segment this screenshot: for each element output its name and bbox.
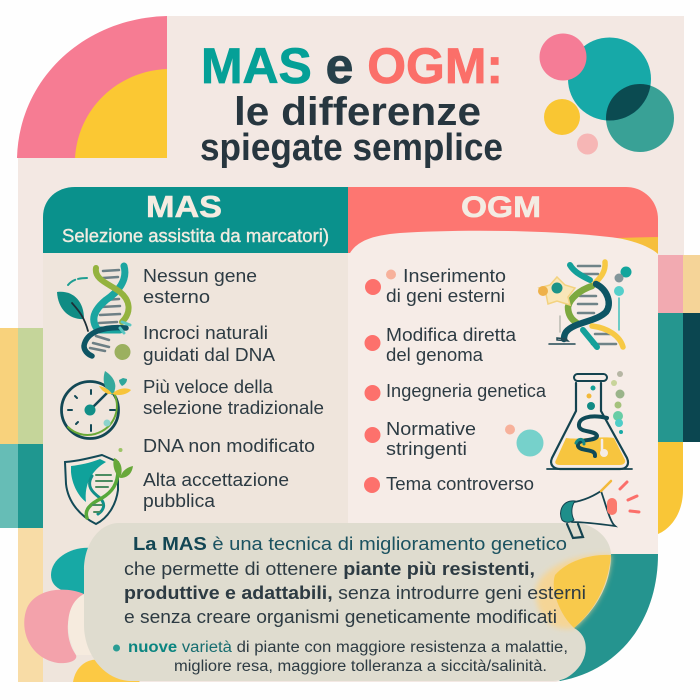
icon: clock with leaves (62, 371, 131, 438)
item: incroci naturali: guidati dal DNA (143, 345, 275, 365)
summary line 5: nuove varietà di piante con maggiore resistenza a malattie, (128, 639, 568, 656)
panel: MAS (43, 187, 348, 553)
item: ingegneria genetica: Ingegneria genetica (386, 381, 547, 401)
circle cluster decoration (540, 34, 674, 154)
item: incroci naturali: Incroci naturali (143, 323, 268, 343)
item: normative stringenti: Normative (386, 419, 476, 439)
item: normative stringenti (364, 419, 476, 459)
left side colour stripes (0, 328, 43, 682)
bottom right teal shape (540, 554, 658, 681)
title: le differenze (234, 90, 481, 134)
icon: megaphone (561, 481, 639, 538)
item: inserimento di geni esterni: Inserimento (403, 266, 506, 286)
icon: shield with DNA and leaves (65, 448, 133, 524)
title: spiegate semplice (200, 127, 503, 169)
item: alta accettazione (143, 470, 289, 511)
corner arc decoration: pink and yellow (17, 16, 167, 158)
MAS heading: MAS (146, 189, 222, 224)
OGM heading: OGM (461, 191, 541, 224)
item: più veloce: selezione tradizionale (143, 398, 324, 418)
MAS subtitle: Selezione assistita da marcatori) (62, 226, 329, 246)
MAS list (143, 266, 324, 511)
item: nessun gene esterno: Nessun gene (143, 266, 257, 286)
summary line 6: migliore resa, maggiore tolleranza a siccità/salinità. (174, 658, 547, 675)
item: alta accettazione: Alta accettazione (143, 470, 289, 490)
item: incroci naturali (143, 323, 275, 365)
summary bullet (113, 644, 120, 652)
bottom left organic shapes (24, 528, 140, 682)
title: MAS e OGM: (201, 38, 503, 94)
right side colour stripes (658, 255, 700, 534)
decorative dots (505, 424, 544, 456)
summary box (84, 523, 611, 681)
summary line 2: che permette di ottenere piante più resistenti, (124, 558, 535, 579)
item: normative stringenti: stringenti (386, 439, 467, 459)
item: nessun gene esterno: esterno (143, 287, 210, 307)
summary line 1: La MAS è una tecnica di miglioramento genetico (133, 533, 567, 554)
item: inserimento di geni esterni: di geni esterni (386, 286, 505, 306)
item: DNA non modificato: DNA non modificato (143, 436, 315, 456)
item: più veloce: Più veloce della (143, 377, 274, 397)
icon: DNA with leaf (57, 266, 130, 360)
item: modifica diretta: del genoma (386, 345, 484, 365)
item: più veloce (143, 377, 324, 418)
yellow blob behind text (536, 555, 611, 629)
item: tema controverso: Tema controverso (386, 474, 534, 494)
item: modifica diretta (364, 325, 517, 365)
summary line 4: e senza creare organismi geneticamente modificati (124, 606, 557, 627)
icon: flask with DNA (547, 371, 632, 469)
item: nessun gene esterno (143, 266, 257, 307)
item: modifica diretta: Modifica diretta (386, 325, 517, 345)
icon: DNA with molecules (538, 262, 632, 347)
OGM list (364, 266, 547, 494)
item: inserimento di geni esterni (365, 266, 506, 306)
summary line 3: produttive e adattabili, senza introdurre geni esterni (124, 582, 586, 603)
item: alta accettazione: pubblica (143, 491, 216, 511)
title (200, 38, 503, 169)
panel: OGM (348, 187, 658, 555)
